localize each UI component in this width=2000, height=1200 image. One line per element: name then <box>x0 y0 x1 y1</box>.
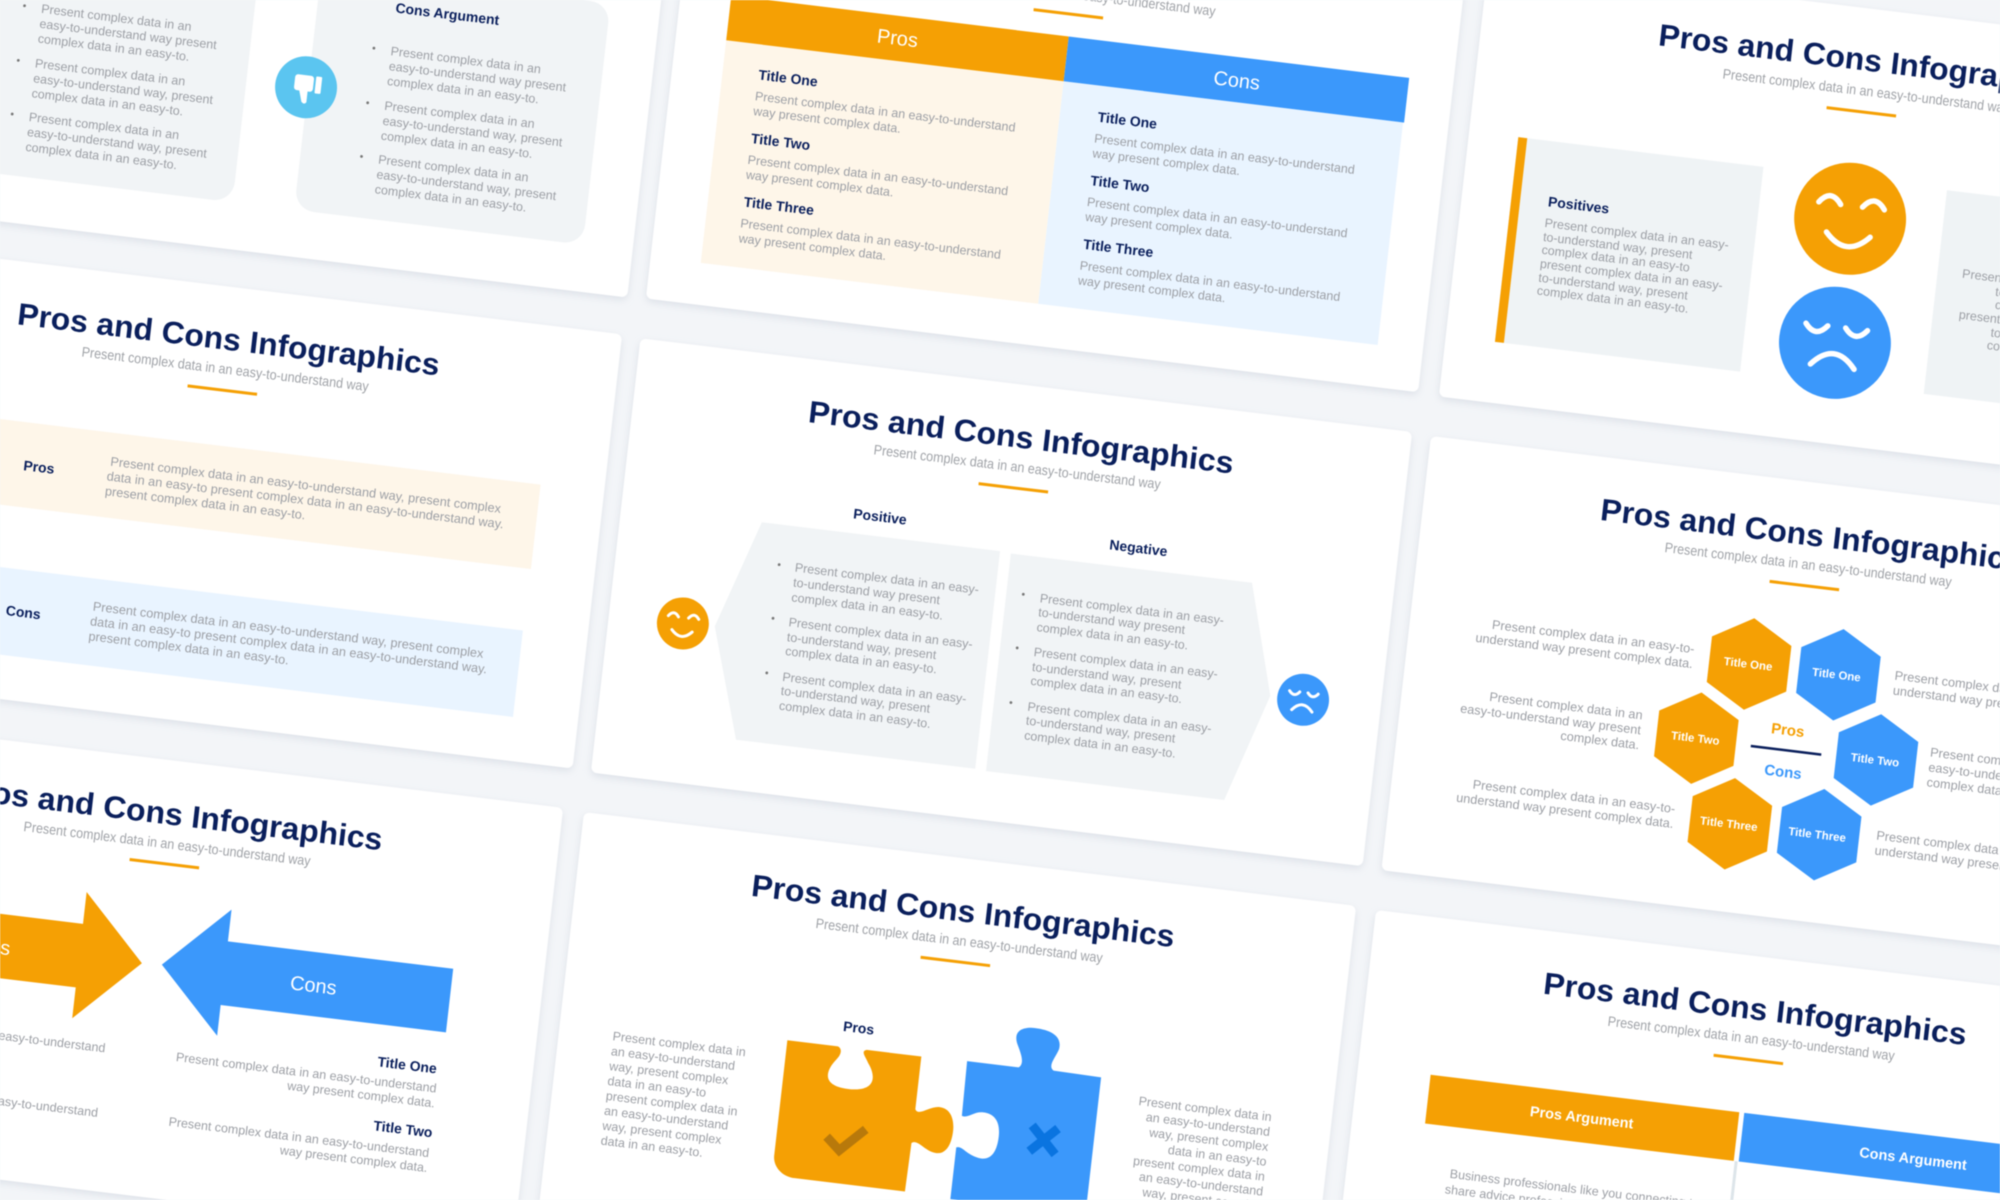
text block: positive bullets: complex data in an easy-to. <box>791 590 944 623</box>
header: pros argument: Pros Argument <box>1529 1104 1634 1133</box>
text block: pros items: way present complex data. <box>744 168 894 199</box>
text block: pros items: Present complex data in an easy-to-understand <box>754 89 1016 135</box>
text block: cons bullets: easy-to-understand way, present <box>382 114 564 150</box>
text block: negative bullets <box>1005 589 1225 765</box>
center label <box>1747 718 1824 785</box>
panel: slide thumbs up and down argument cards <box>0 0 677 297</box>
hexagon: pros title one <box>1704 613 1794 715</box>
text block: negative bullets: complex data in an easy-to. <box>1030 674 1183 706</box>
text block: cons bullets: Present complex data in an <box>384 99 535 131</box>
divider <box>1712 1161 1738 1200</box>
panel: pros row: Pros <box>23 457 56 477</box>
panel: pros row: data in an easy-to present complex data in an easy-to-understand way. <box>106 468 504 531</box>
subtitle: Present complex data in an easy-to-understand way <box>81 343 370 394</box>
text block: pros bullets: complex data in an easy-to. <box>31 86 184 119</box>
text block: cons items: Title Two <box>1090 172 1150 195</box>
hexagon: pros title one: Title One <box>1723 656 1773 674</box>
center label: Cons <box>1763 762 1803 783</box>
text block: cons items <box>166 1029 441 1175</box>
text block: pros bullets: Present complex data in an <box>34 56 186 89</box>
hexagon: pros title three <box>1685 773 1775 874</box>
panel: negatives card <box>1924 190 2000 424</box>
text block: negative bullets: Present complex data in an easy- <box>1033 645 1219 681</box>
text block: left: data in an easy-to <box>607 1074 707 1100</box>
text block: cons bullets: easy-to-understand way present <box>388 59 567 95</box>
hexagon: cons title two: Title Two <box>1850 752 1900 770</box>
panel: slide pros and cons table <box>646 0 1468 392</box>
text block: cons items <box>1076 108 1358 319</box>
text block: pros bullets: Present complex data in an <box>41 2 192 34</box>
icon: sad face <box>1773 280 1897 405</box>
panel: cons row: Cons <box>5 602 42 622</box>
text block: left descriptions: Present complex data in an easy-to- <box>1491 617 1695 656</box>
header: pros argument <box>1425 1075 1739 1161</box>
underline accent <box>1713 1054 1783 1065</box>
text block: pros items: Title Two <box>750 130 811 153</box>
hexagon: pros title two <box>1651 688 1741 789</box>
text block: pros items: way present complex data. <box>752 104 902 136</box>
text block: pros bullets: easy-to-understand way present <box>39 17 218 52</box>
text block: left descriptions: Present complex data in an <box>1489 689 1643 722</box>
subtitle: Present complex data in an easy-to-understand way <box>873 441 1162 492</box>
panel: pros column body <box>701 40 1064 304</box>
text block: cons items: Present complex data in an easy-to-understand <box>1094 131 1356 177</box>
text block: negative bullets: Present complex data in an easy- <box>1039 591 1225 628</box>
header: pros <box>726 0 1069 81</box>
arrow: cons <box>155 902 457 1063</box>
text block: pros items: Present complex data in an easy-to-understand <box>740 216 1002 262</box>
panel: pros row: present complex data in an easy-to. <box>104 483 306 522</box>
panel: cons argument card <box>294 0 610 245</box>
text block: cons bullets: complex data in an easy-to. <box>386 74 540 106</box>
text block: cons items: way present complex data. <box>1076 273 1226 305</box>
panel: positives card: complex data in an easy-to. <box>1536 284 1689 316</box>
text block: left: present complex data in <box>605 1089 738 1119</box>
text block: positive bullets: Present complex data in an easy- <box>788 615 973 652</box>
icon: sad face <box>1274 671 1332 729</box>
text block: left: an easy-to-understand <box>603 1104 729 1133</box>
header: cons: Cons <box>1212 67 1261 95</box>
panel: positive shape <box>702 518 1000 769</box>
text block: positive bullets <box>761 559 980 735</box>
subtitle: Present complex data in an easy-to-understand way <box>1664 539 1953 590</box>
panel: positives card: to-understand way, present <box>1538 271 1689 303</box>
panel: negative shape <box>986 553 1283 804</box>
text block: positive bullets: Present complex data in an easy- <box>782 670 967 706</box>
text block: left descriptions <box>1449 614 1695 831</box>
heading: cons argument: Cons Argument <box>395 0 501 28</box>
heading: positive: Positive <box>853 505 908 528</box>
text block: cons items: way present complex data. <box>278 1143 428 1175</box>
panel: pros row: Present complex data in an easy-to-understand way, present complex <box>110 454 502 516</box>
text block: cons items: Title Three <box>1082 236 1154 260</box>
text block: left: data in an easy-to. <box>600 1134 704 1160</box>
text block: cons bullets: easy-to-understand way, present <box>376 167 557 203</box>
text block: left: way, present complex <box>601 1119 723 1147</box>
text block: cons items: way present complex data. <box>1084 210 1234 242</box>
text block: pros bullets: Present complex data in an <box>28 110 180 142</box>
text block: right: Present complex data in <box>1138 1094 1272 1124</box>
panel: positives card: Positives <box>1547 193 1610 217</box>
panel: cons column body <box>1038 81 1403 345</box>
hexagon: pros title two: Title Two <box>1670 730 1720 748</box>
text block: negative bullets: to-understand way, present <box>1031 660 1183 692</box>
text block: right: an easy-to-understand <box>1138 1170 1264 1199</box>
text block: cons bullets: complex data in an easy-to. <box>380 129 533 161</box>
panel: slide pros and cons rows <box>0 240 622 769</box>
text block: left descriptions: Present complex data in an easy-to- <box>1472 777 1676 816</box>
panel: slide puzzle <box>534 812 1356 1200</box>
text block: pros bullets <box>6 0 222 176</box>
text block: cons items: Present complex data in an easy-to-understand <box>168 1115 430 1160</box>
text block: left descriptions: understand way present complex data. <box>1475 630 1694 671</box>
text block: cons items: Title One <box>377 1053 438 1076</box>
text block: left: an easy-to-understand <box>610 1044 736 1073</box>
panel: positives card <box>1495 137 1763 372</box>
text block: left descriptions: complex data. <box>1560 728 1640 752</box>
panel: positives card: to-understand way, present <box>1542 230 1694 262</box>
text block: cons items: Title Two <box>373 1117 433 1140</box>
panel: pros row <box>0 405 541 569</box>
header: cons <box>1064 37 1409 123</box>
text block: pros bullets: complex data in an easy-to. <box>25 140 178 172</box>
title: Pros and Cons Infographics <box>807 394 1235 481</box>
title: Pros and Cons Infographics <box>1542 966 1969 1052</box>
text block: pros bullets: easy-to-understand way, present <box>26 125 208 161</box>
puzzle piece: cons <box>950 1020 1106 1200</box>
panel: slide positive and negative arrows-hex <box>591 338 1412 866</box>
panel: positives card: present complex data in an easy- <box>1539 257 1723 293</box>
text block: pros items: Present complex data in an easy-to-understand <box>747 153 1009 198</box>
underline accent <box>129 858 199 869</box>
text block: cons items: way present complex data. <box>286 1079 436 1110</box>
text block: positive bullets: complex data in an easy-to. <box>778 699 931 731</box>
text block: pros items: Title Three <box>743 194 815 218</box>
panel: pros argument card <box>0 0 260 202</box>
text block: pros items: Title One <box>758 66 819 90</box>
puzzle piece: pros <box>772 1040 961 1196</box>
text block: cons bullets: Present complex data in an <box>378 153 529 185</box>
text block: negative bullets: to-understand way, present <box>1025 714 1177 746</box>
text block: cons bullets <box>356 42 572 218</box>
text block: cons bullets: complex data in an easy-to. <box>374 182 527 215</box>
panel: positives card: complex data in an easy-to <box>1541 243 1691 275</box>
text block: positive bullets: to-understand way, present <box>780 684 931 716</box>
text block: right descriptions <box>1874 668 2000 885</box>
underline accent <box>978 482 1048 494</box>
underline accent <box>187 384 257 396</box>
hexagon: cons title three: Title Three <box>1788 826 1846 845</box>
panel: slide positives and negatives faces <box>1439 0 2000 490</box>
panel: cons row: data in an easy-to present complex data in an easy-to-understand way. <box>89 613 488 676</box>
text block: right: way, present complex <box>1148 1125 1270 1154</box>
icon: happy face <box>654 595 712 652</box>
header: cons argument: Cons Argument <box>1858 1145 1968 1174</box>
hexagon: pros title three: Title Three <box>1699 815 1758 834</box>
text block: positive bullets: complex data in an easy-to. <box>785 644 938 676</box>
underline accent <box>920 956 990 967</box>
subtitle: Present complex data in an easy-to-understand way <box>815 915 1104 966</box>
panel: slide arrows <box>0 714 563 1200</box>
text block: cons items: way present complex data. <box>1091 146 1241 178</box>
icon: thumbs down <box>272 53 340 122</box>
text block: pros items <box>0 989 109 1135</box>
arrow: pros <box>0 865 149 1026</box>
panel: cons row: Present complex data in an easy-to-understand way, present complex <box>92 599 485 661</box>
hexagon: cons title two <box>1831 709 1921 810</box>
text block: positive bullets: to-understand way present <box>792 576 941 607</box>
header: cons argument <box>1739 1113 2000 1199</box>
text block: negative bullets: Present complex data in an easy- <box>1027 700 1212 736</box>
text block: right: data in an easy-to <box>1167 1143 1267 1169</box>
hexagon: cons title three <box>1774 784 1864 885</box>
text block: pros items: way present complex data. <box>737 231 887 263</box>
header: pros: Pros <box>876 25 919 52</box>
text block: positive bullets: to-understand way, present <box>786 630 938 662</box>
underline accent <box>1769 580 1839 591</box>
hexagon: cons title one <box>1794 624 1883 725</box>
text block: left: way, present complex <box>608 1059 730 1087</box>
heading: negative: Negative <box>1109 536 1169 559</box>
icon: happy face <box>1788 156 1912 281</box>
panel: positives card: Present complex data in an easy- <box>1544 216 1729 252</box>
subtitle: Present complex data in an easy-to-understand way <box>1607 1013 1896 1064</box>
panel: cons row: present complex data in an easy-to. <box>88 628 290 667</box>
text block: pros items <box>737 66 1019 277</box>
panel: slide argument columns <box>1326 910 2000 1200</box>
title: Pros and Cons Infographics <box>16 296 441 382</box>
underline accent <box>1033 8 1103 20</box>
text block: negative bullets: complex data in an easy-to. <box>1036 620 1189 652</box>
text block: pros bullets: complex data in an easy-to. <box>37 32 190 64</box>
text block: left: Present complex data in <box>612 1029 747 1059</box>
arrow: cons: Cons <box>289 972 338 1000</box>
title: Pros and Cons Infographics <box>750 868 1177 954</box>
text block: right: an easy-to-understand <box>1145 1110 1271 1139</box>
text block: cons items: Present complex data in an easy-to-understand <box>1086 195 1348 241</box>
text block: cons items: Present complex data in an easy-to-understand <box>175 1050 437 1096</box>
text block: left descriptions: easy-to-understand way present <box>1460 701 1642 737</box>
center label: Pros <box>1770 720 1805 741</box>
text block: left descriptions: understand way present complex data. <box>1456 790 1674 831</box>
text block: negative bullets: complex data in an easy-to. <box>1023 728 1177 761</box>
hexagon: cons title one: Title One <box>1811 667 1861 684</box>
text block: positive bullets: Present complex data in an easy- <box>794 561 980 597</box>
text block: cons items: Present complex data in an easy-to-understand <box>1079 259 1341 304</box>
heading: pros: Pros <box>842 1018 875 1038</box>
text block: pros bullets: easy-to-understand way, present <box>33 71 214 107</box>
panel: slide hexagons <box>1381 436 2000 964</box>
panel: cons row <box>0 551 523 717</box>
text block: right: present complex data in <box>1132 1154 1266 1184</box>
text block: cons bullets: Present complex data in an <box>390 44 542 76</box>
subtitle: Present complex data in an easy-to-understand way <box>23 818 311 869</box>
text block: cons items: Title One <box>1097 109 1158 132</box>
underline accent <box>1826 106 1896 118</box>
text block: negative bullets: to-understand way present <box>1038 605 1186 637</box>
